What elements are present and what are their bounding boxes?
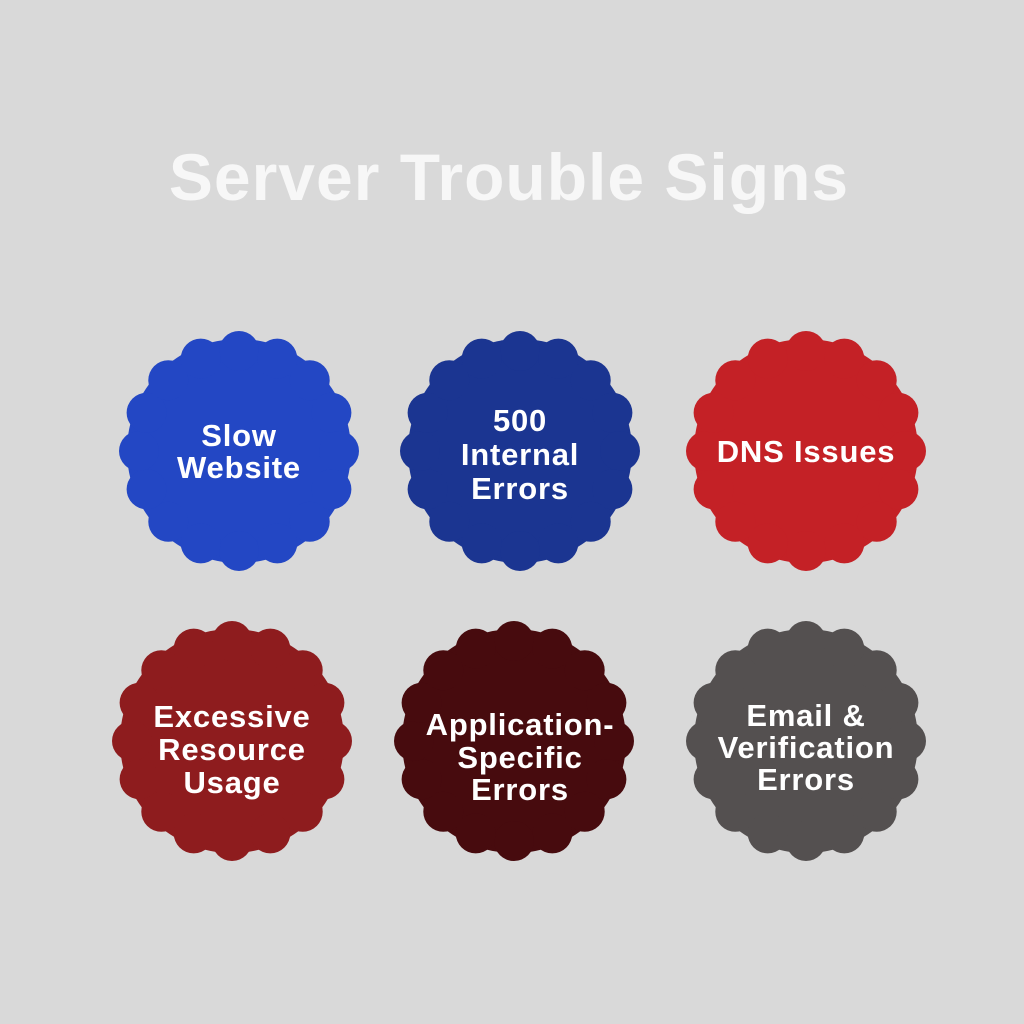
badge: application-specific errors: Specific	[457, 740, 583, 775]
badge: slow website: Website	[177, 450, 301, 485]
badge: 500 internal errors: 500	[493, 403, 547, 438]
badge: slow website: Slow	[201, 418, 277, 453]
badge: slow website	[119, 331, 359, 571]
badge: application-specific errors	[394, 621, 634, 861]
title: Server Trouble Signs	[169, 140, 849, 214]
badge: application-specific errors: Application-	[426, 707, 614, 742]
badge: DNS issues	[686, 331, 926, 571]
badge: excessive resource usage	[112, 621, 352, 861]
badge: email & verification errors: Verification	[718, 730, 894, 765]
badge: 500 internal errors: Internal	[461, 437, 579, 472]
badge: email & verification errors: Errors	[757, 762, 855, 797]
badge: 500 internal errors: Errors	[471, 471, 569, 506]
badge: email & verification errors: Email &	[746, 698, 866, 733]
badge: application-specific errors: Errors	[471, 772, 569, 807]
badge: email & verification errors	[686, 621, 926, 861]
badge: 500 internal errors	[400, 331, 640, 571]
badge: excessive resource usage: Usage	[183, 765, 281, 800]
badge: excessive resource usage: Resource	[158, 732, 306, 767]
badge: DNS issues: DNS Issues	[717, 434, 895, 469]
badge: excessive resource usage: Excessive	[153, 699, 311, 734]
